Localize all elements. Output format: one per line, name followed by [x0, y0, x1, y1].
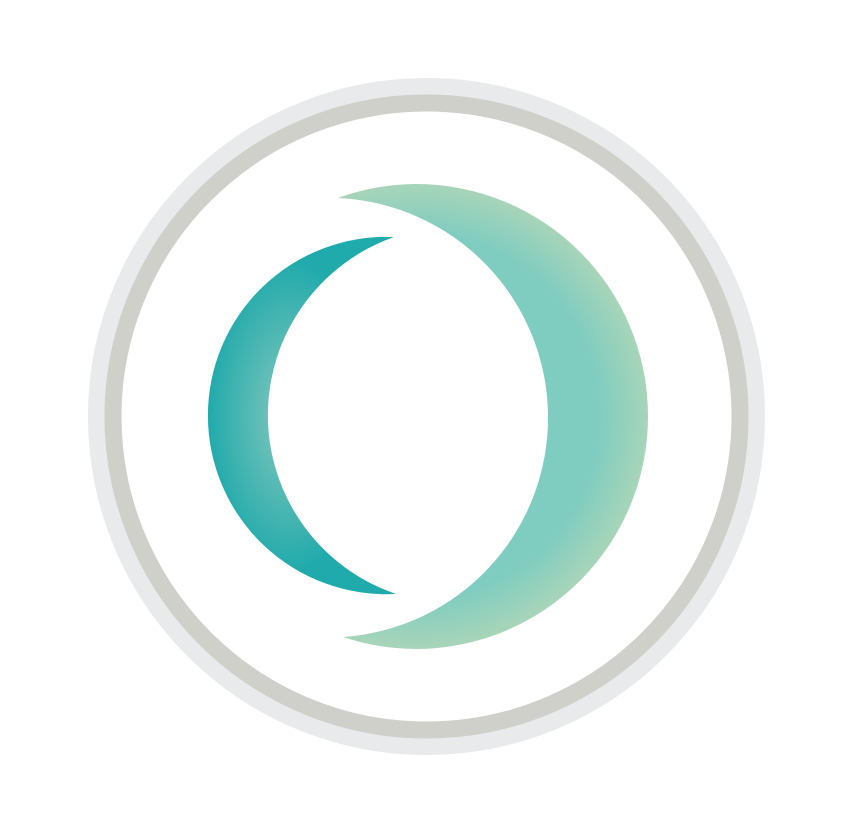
- inner ring: [113, 103, 740, 730]
- right crescent: [338, 184, 648, 649]
- left crescent: [208, 237, 396, 594]
- outer ring: [96, 86, 756, 746]
